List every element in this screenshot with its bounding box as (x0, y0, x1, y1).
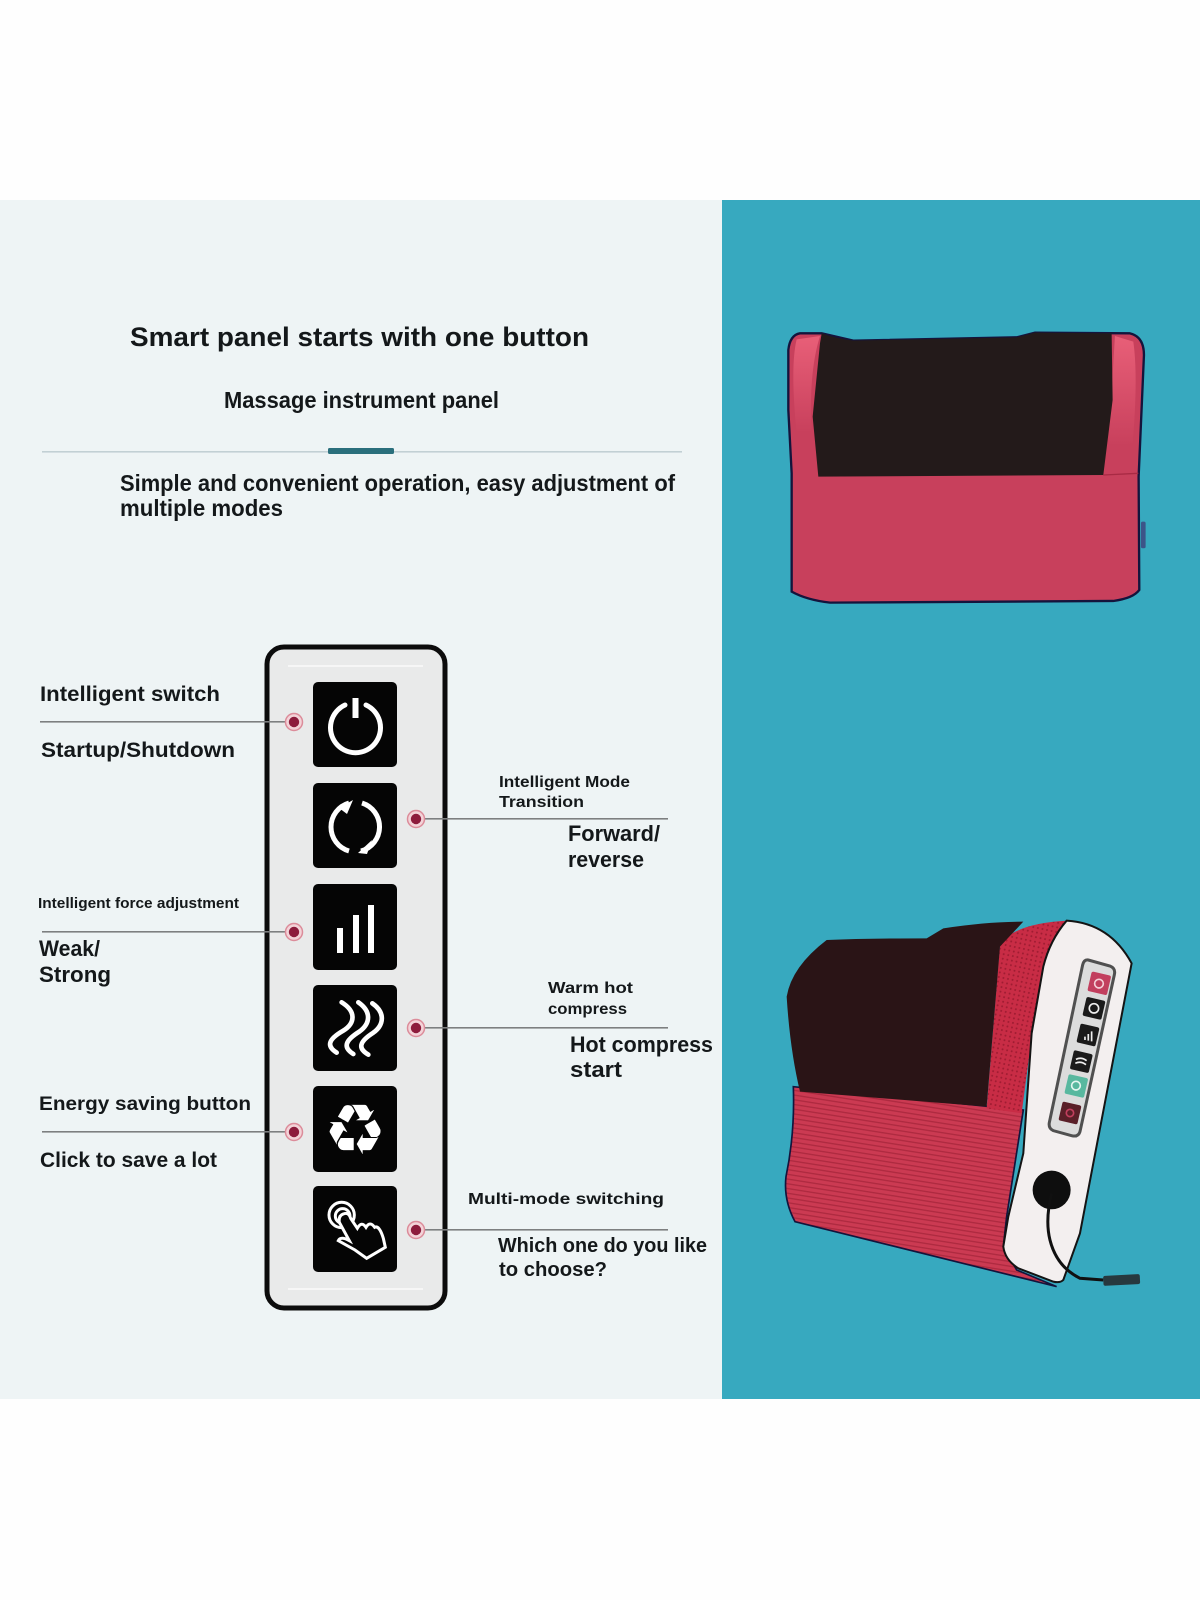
callout: intelligent force adjustment: Intelligent force adjustment (38, 896, 239, 912)
callout: intelligent mode transition (408, 774, 668, 872)
button: power (313, 682, 397, 767)
pillow red body (786, 921, 1068, 1287)
product: massage pillow front view (788, 333, 1146, 603)
button: heat waves (313, 985, 397, 1071)
callout: intelligent switch: Startup/Shutdown (41, 739, 235, 762)
subtitle: Massage instrument panel (224, 387, 499, 413)
divider with teal accent (42, 448, 682, 454)
pillow white side panel (1003, 921, 1132, 1282)
callout: energy saving button: Click to save a lot (40, 1149, 217, 1172)
callout: energy saving button (39, 1094, 302, 1172)
callout: multi-mode switching (408, 1191, 707, 1281)
callout: intelligent switch (40, 683, 302, 762)
button: touch hand (313, 1186, 397, 1272)
pillow control strip (1049, 960, 1115, 1136)
panel: right teal background (722, 200, 1200, 1399)
button: recycle: ♻ (324, 1089, 386, 1171)
callout: multi-mode switching: Which one do you like (498, 1235, 707, 1257)
callout: warm hot compress (408, 980, 713, 1082)
pillow mesh (787, 922, 1023, 1107)
title: Smart panel starts with one button (130, 322, 589, 352)
callout: intelligent switch: Intelligent switch (40, 683, 220, 706)
callout: multi-mode switching: Multi-mode switching (468, 1191, 664, 1208)
description text (120, 470, 675, 521)
callout: multi-mode switching: to choose? (499, 1259, 607, 1281)
callout: warm hot compress: Warm hot (548, 980, 634, 997)
callout: intelligent force adjustment: Weak/ (39, 936, 100, 961)
callout: intelligent force adjustment (38, 896, 302, 987)
callout: warm hot compress: start (570, 1057, 623, 1082)
button: direction cycle (313, 783, 397, 868)
callout: warm hot compress: compress (548, 1001, 627, 1018)
callout: intelligent force adjustment: Strong (39, 962, 111, 987)
panel: left light background (0, 200, 722, 1399)
product: massage pillow side view (786, 921, 1140, 1287)
description text: multiple modes (120, 495, 283, 521)
control panel frame (267, 647, 445, 1308)
callout: intelligent mode transition: reverse (568, 847, 644, 872)
callout: intelligent mode transition: Transition (499, 794, 584, 811)
button: force bars (313, 884, 397, 970)
callout: intelligent mode transition: Forward/ (568, 821, 660, 846)
callout: energy saving button: Energy saving button (39, 1094, 251, 1115)
description text: Simple and convenient operation, easy adjustment of (120, 470, 675, 496)
callout: warm hot compress: Hot compress (570, 1032, 713, 1057)
callout: intelligent mode transition: Intelligent Mode (499, 774, 630, 791)
pillow power cable (1033, 1171, 1140, 1286)
